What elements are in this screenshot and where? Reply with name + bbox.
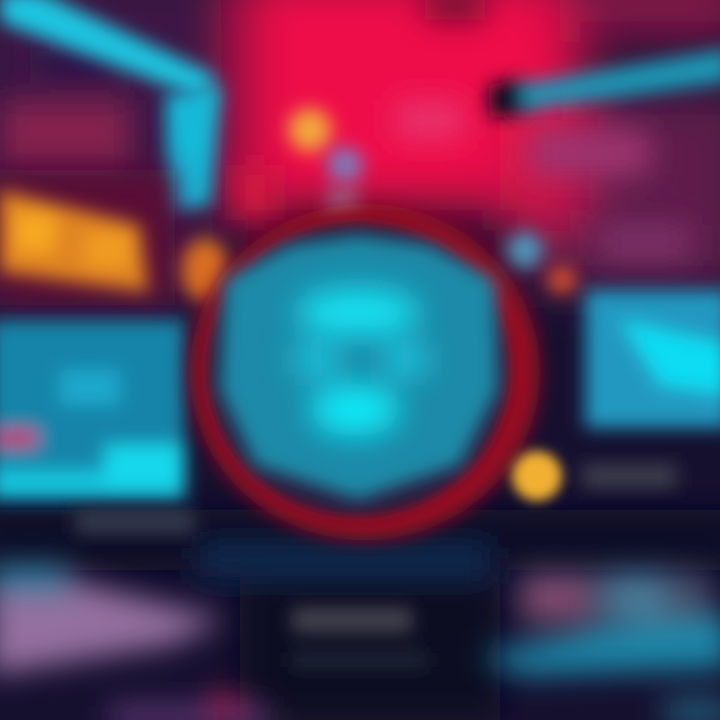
dot: cyan right of ring bbox=[507, 232, 543, 268]
upper background glow bbox=[0, 0, 720, 310]
dot: yellow lower right bbox=[512, 451, 562, 501]
red ring bbox=[190, 204, 540, 540]
lower dark bands bbox=[0, 510, 720, 720]
dot: orange right of ring bbox=[548, 266, 576, 294]
orange sign: left bbox=[0, 170, 175, 305]
orange sign glyph blocks bbox=[0, 190, 148, 292]
inner dark edge bbox=[208, 224, 508, 516]
beam: top-left cyan bbox=[0, 0, 215, 100]
ring connector bbox=[328, 190, 358, 235]
text bar: grey left bbox=[75, 510, 195, 534]
screen: right bbox=[585, 290, 720, 428]
bright cyan symbol bbox=[295, 288, 427, 436]
text bar: grey bottom centre bbox=[292, 608, 427, 668]
dot: yellow top bbox=[288, 108, 332, 152]
dot: lavender bbox=[327, 147, 363, 183]
badge: ring and shield bbox=[190, 204, 540, 540]
screen: left bbox=[0, 320, 185, 500]
orange accent near ring bbox=[181, 238, 229, 302]
beam: top-right teal bbox=[488, 48, 720, 118]
panel: bottom left lilac bbox=[0, 565, 270, 720]
text bar: grey right bbox=[582, 464, 677, 488]
beam: vertical cyan bbox=[165, 85, 222, 212]
panel: bottom right teal bbox=[480, 572, 720, 720]
teal shield bbox=[220, 235, 498, 500]
pink haze panels bbox=[0, 0, 690, 260]
